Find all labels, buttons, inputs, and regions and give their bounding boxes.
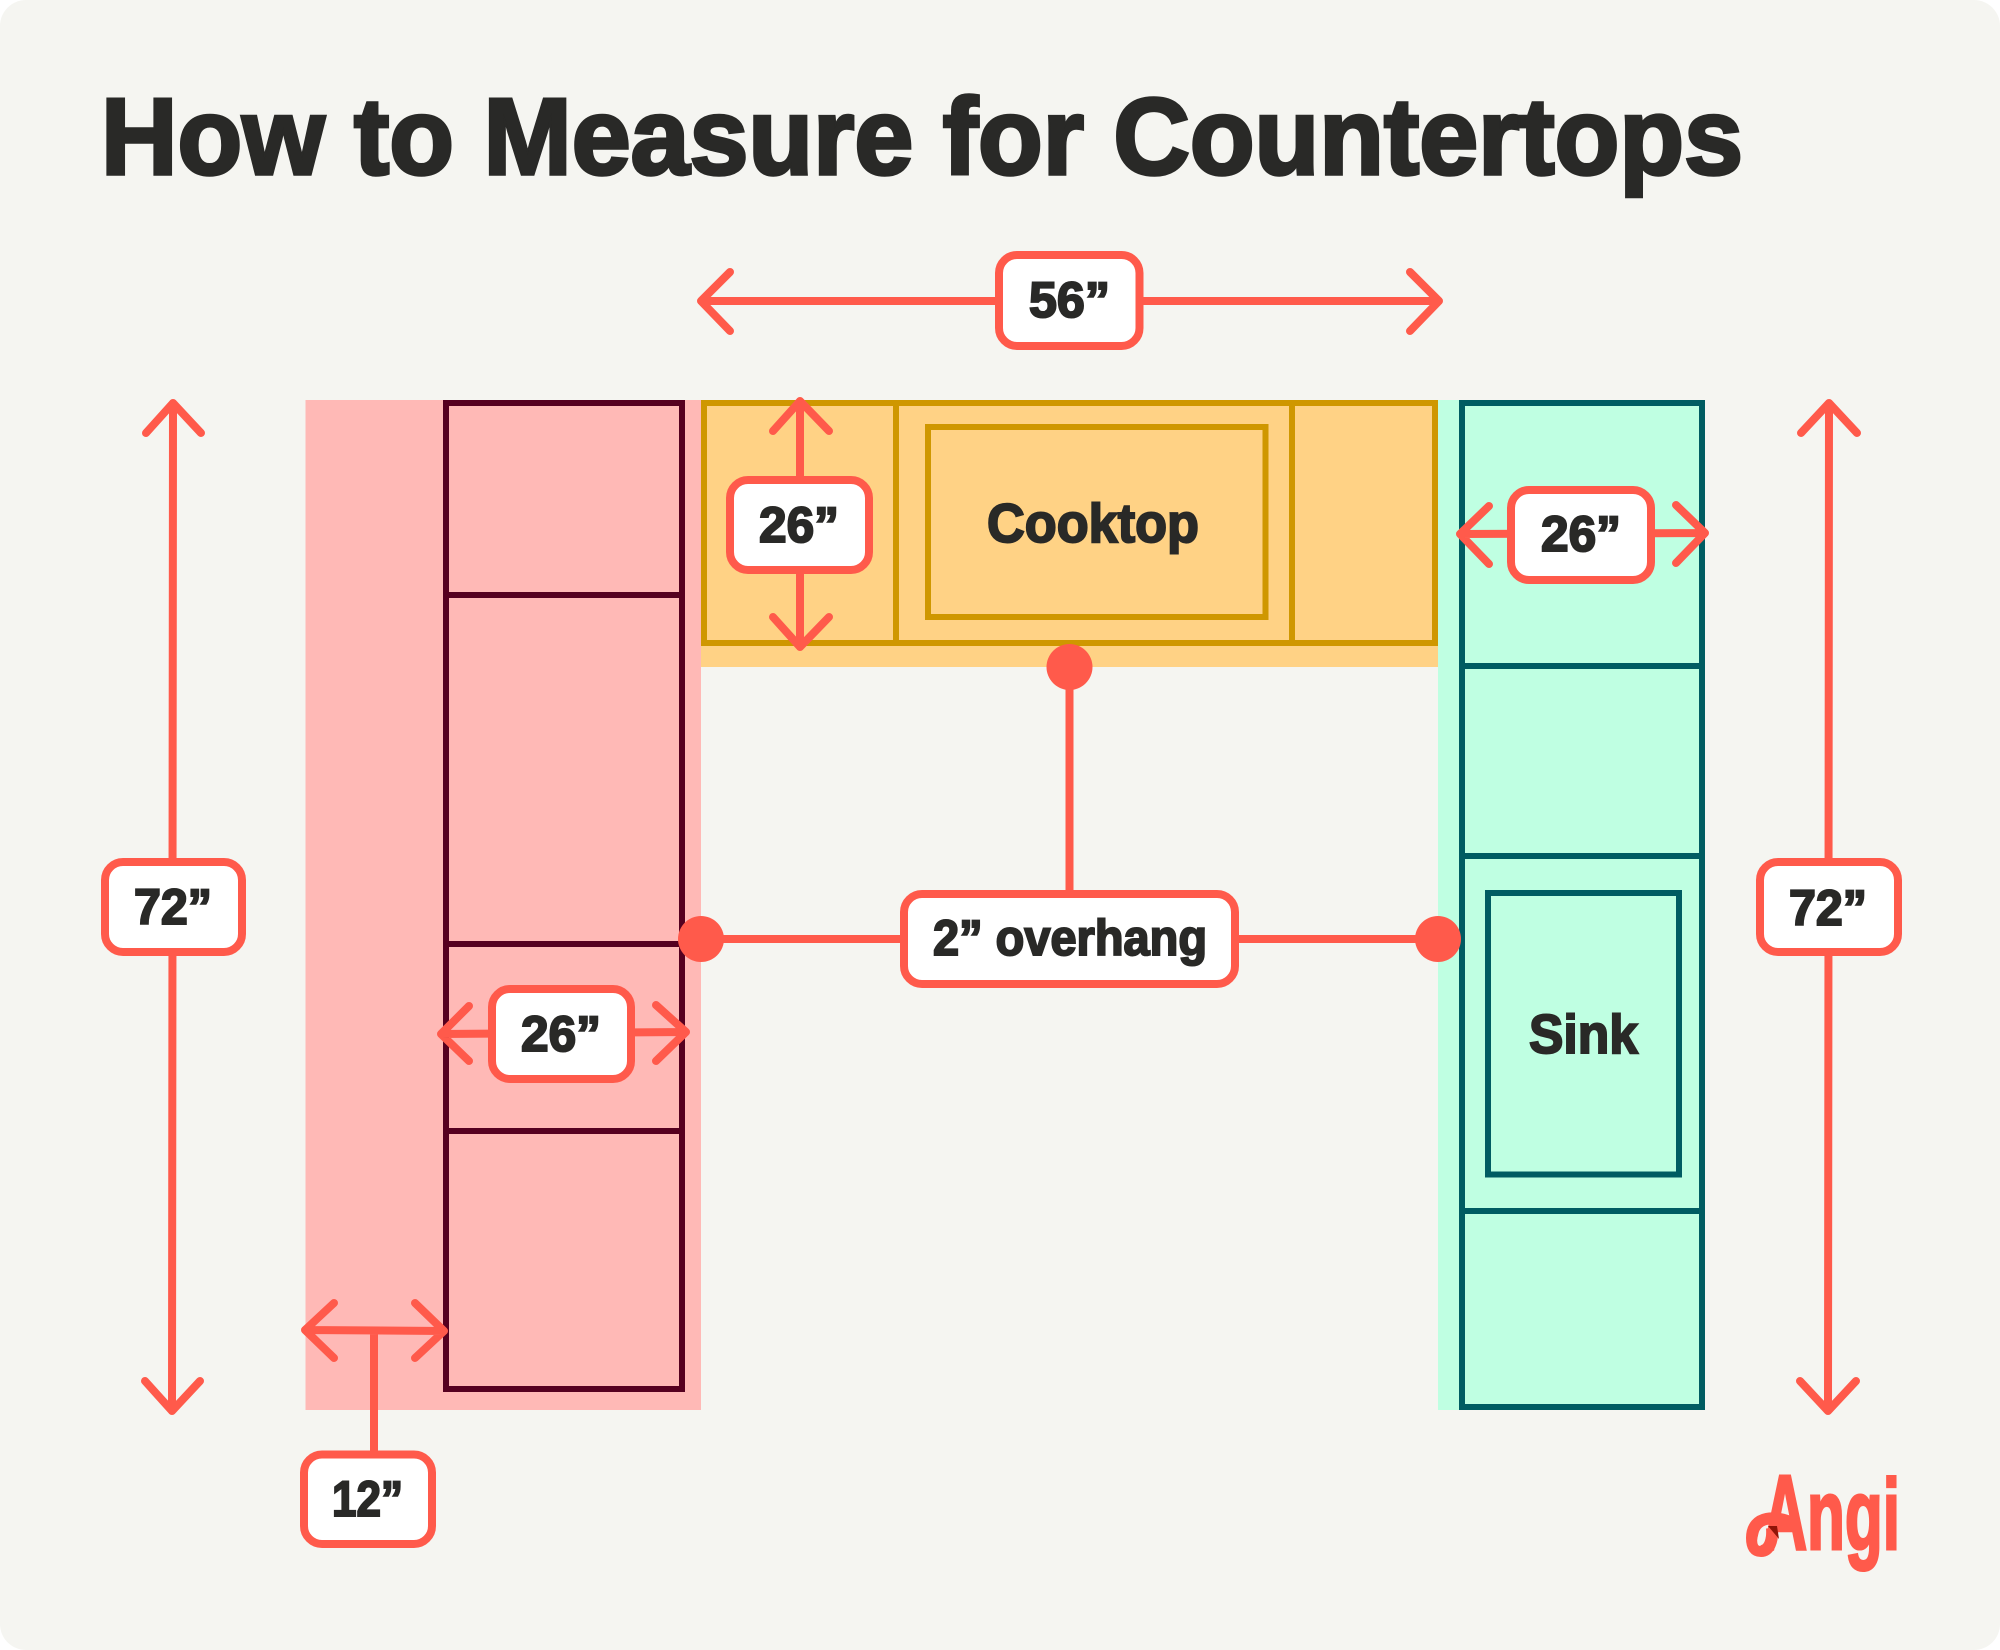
cooktop outline [928,427,1266,617]
arrow: 26 inch left counter depth: 26” [521,1006,601,1062]
logo: Angi: ngi [1807,1459,1900,1571]
arrow: 26 inch sink counter depth: 26” [1541,506,1621,562]
sink outline [1488,893,1679,1174]
arrow: 26 inch left counter depth [441,989,686,1079]
panel: cooktop cabinets [704,403,1435,643]
title: How to Measure for Countertops [101,76,1743,198]
cooktop label: Cooktop [987,492,1199,554]
sink label: Sink [1529,1003,1638,1065]
arrow: 26 inch sink counter depth [1460,490,1705,580]
arrow: 12 inch overhang [304,1303,444,1544]
arrow: 56 inch top width [701,255,1439,346]
arrow: 72 inch left length [105,403,242,1411]
arrow: 72 inch right length: 72” [1789,880,1867,936]
panel: right counter overhang area [1438,400,1705,1410]
arrow: 72 inch right length [1760,403,1898,1411]
arrow: 72 inch left length: 72” [134,879,212,935]
arrow: 56 inch top width: 56” [1029,272,1110,328]
arrow: 26 inch cooktop depth [730,401,869,647]
panel: top counter overhang area [701,400,1438,667]
panel: left cabinets [446,403,682,1389]
arrow: 12 inch overhang: 12” [332,1471,403,1527]
callout: 2 inch overhang [678,644,1461,984]
callout: 2 inch overhang: 2” overhang [933,910,1207,966]
panel: sink cabinets [1462,403,1702,1407]
arrow: 26 inch cooktop depth: 26” [759,497,839,553]
panel: left counter overhang area [306,400,701,1410]
logo: Angi: A [1763,1454,1807,1572]
logo: Angi [1752,1454,1900,1572]
